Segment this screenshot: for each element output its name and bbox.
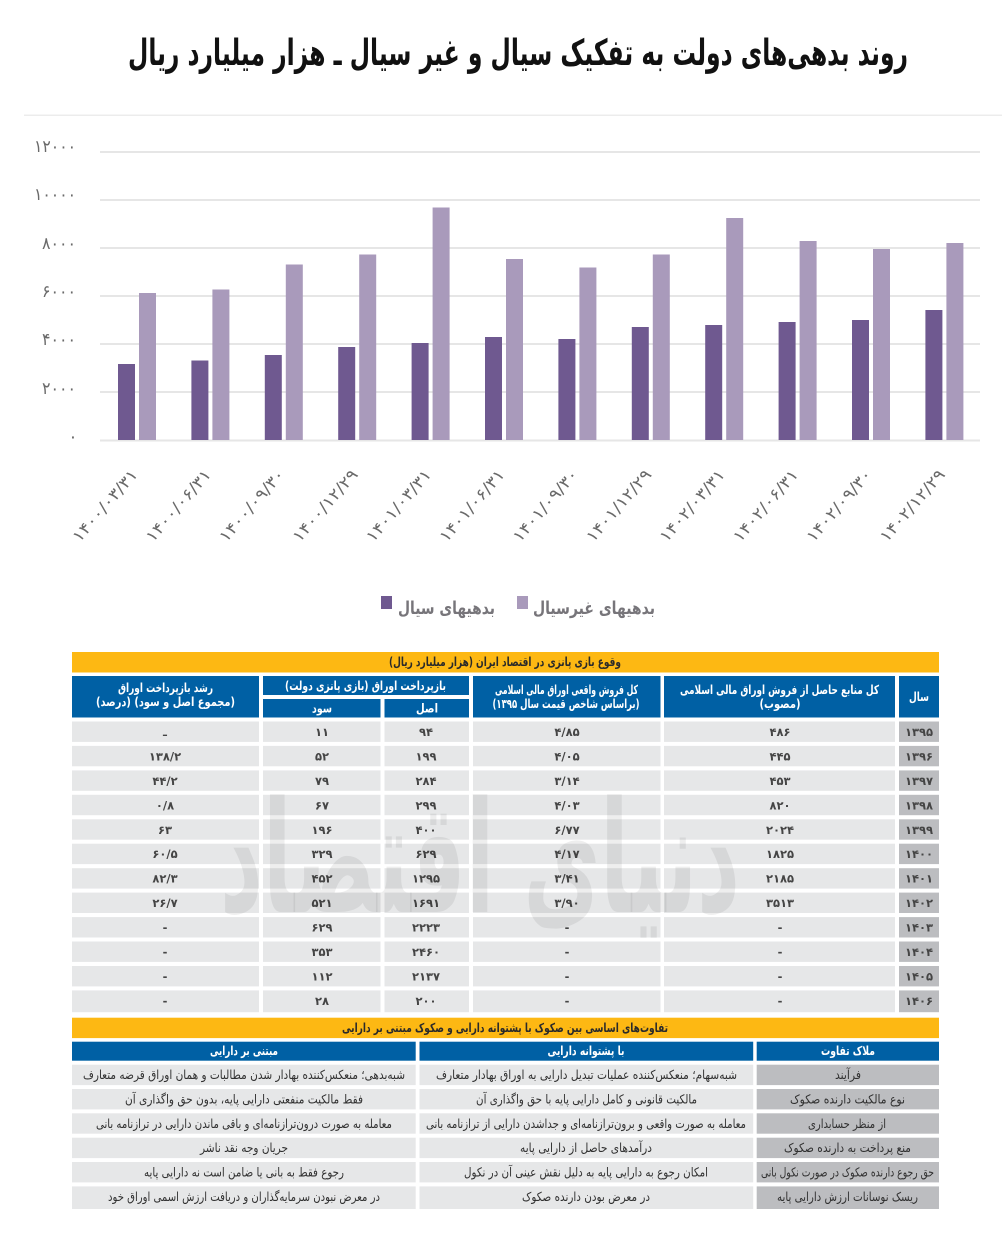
banner: sukuk table title — [72, 1018, 939, 1038]
row 1397: ۴۴/۲ — [152, 774, 178, 788]
row 1405: - — [163, 970, 168, 984]
row 1401: ۳/۴۱ — [554, 872, 580, 886]
row: value risk — [72, 1186, 939, 1209]
row 1396: ۵۲ — [315, 749, 329, 763]
row 1401 — [72, 868, 939, 889]
x axis date labels — [68, 465, 949, 546]
x axis date labels: ۱۴۰۱/۰۹/۳۰ — [509, 465, 582, 546]
y axis labels: ۱۰۰۰۰ — [34, 185, 76, 205]
row 1398: ۰/۸ — [156, 798, 174, 812]
row: process: شبه‌سهام؛ منعکس‌کننده عملیات تبدیل دارایی به اوراق بهادار متعارف — [436, 1067, 737, 1083]
row 1406: ۲۸ — [315, 994, 329, 1008]
row 1395 — [72, 722, 939, 742]
row 1404: ۲۴۶۰ — [412, 945, 440, 959]
x axis date labels: ۱۴۰۰/۰۶/۳۱ — [142, 465, 215, 546]
row 1405: ۲۱۳۷ — [412, 970, 440, 984]
dark bars: liquid debts — [118, 310, 942, 440]
row 1398: ۸۲۰ — [769, 798, 791, 812]
row 1401: ۸۲/۳ — [152, 872, 178, 886]
x axis date labels: ۱۴۰۲/۰۳/۳۱ — [655, 465, 729, 546]
row 1404: - — [163, 945, 168, 959]
row: process — [72, 1065, 939, 1085]
table: sukuk differences — [72, 1018, 939, 1209]
x axis date labels: ۱۴۰۰/۰۳/۳۱ — [68, 465, 142, 546]
row 1403: ۶۲۹ — [311, 921, 333, 935]
row: ownership type — [72, 1089, 939, 1109]
x axis date labels: ۱۴۰۲/۰۹/۳۰ — [802, 465, 876, 546]
bar chart — [34, 137, 980, 546]
row 1395: ـ — [162, 725, 168, 739]
row 1405: - — [778, 970, 783, 984]
row 1398: ۲۹۹ — [415, 798, 437, 812]
light bars: non-liquid debts — [139, 208, 963, 440]
row 1399: ۲۰۲۴ — [766, 823, 794, 837]
row 1402: ۳۵۱۳ — [766, 896, 794, 910]
row: value risk: در معرض بودن دارنده صکوک — [522, 1189, 650, 1205]
row 1402: ۱۶۹۱ — [412, 896, 440, 910]
row 1405: - — [565, 970, 570, 984]
row 1400: ۱۴۰۰ — [905, 847, 933, 861]
row 1406: - — [163, 994, 168, 1008]
row 1403: ۲۲۲۳ — [412, 921, 440, 935]
row 1400: ۶۰/۵ — [152, 847, 178, 861]
row 1396: ۱۳۹۶ — [905, 749, 933, 763]
row 1399: ۶۳ — [158, 823, 172, 837]
row 1398: ۱۳۹۸ — [905, 798, 933, 812]
row 1402: ۵۲۱ — [311, 896, 333, 910]
x axis date labels: ۱۴۰۲/۱۲/۲۹ — [876, 465, 949, 546]
y axis labels: ۰ — [68, 427, 78, 447]
row 1399: ۱۹۶ — [311, 823, 333, 837]
legend: بدهیهای سیال — [398, 599, 495, 619]
row: ownership type: مالکیت قانونی و کامل دارایی پایه با حق واگذاری آن — [476, 1092, 697, 1108]
x axis date labels: ۱۴۰۱/۰۶/۳۱ — [435, 465, 509, 546]
row 1397 — [72, 770, 939, 791]
x axis date labels: ۱۴۰۲/۰۶/۳۱ — [729, 465, 802, 546]
sukuk table header: با پشتوانه دارایی — [548, 1043, 624, 1058]
row 1400: ۳۲۹ — [311, 847, 333, 861]
sukuk table header — [72, 1042, 939, 1061]
legend: بدهیهای غیرسیال — [533, 599, 655, 619]
row 1396: ۱۳۸/۲ — [149, 749, 181, 763]
row 1399: ۶/۷۷ — [554, 823, 580, 837]
row: recourse right: امکان رجوع به دارایی پایه به دلیل نقش عینی آن در نکول — [464, 1164, 708, 1180]
row: process: شبه‌بدهی؛ منعکس‌کننده بهادار شدن مطالبات و همان اوراق قرضه متعارف — [83, 1067, 405, 1083]
row 1395: ۴/۸۵ — [554, 725, 580, 739]
row 1396 — [72, 746, 939, 766]
row 1406: ۱۴۰۶ — [905, 994, 933, 1008]
row: process: فرآیند — [835, 1067, 861, 1083]
table header: (مصوب) — [760, 696, 800, 711]
row 1395: ۴۸۶ — [769, 725, 791, 739]
row: payment source: منع پرداخت به دارنده صکوک — [784, 1140, 911, 1156]
y axis labels — [34, 137, 78, 447]
row 1402 — [72, 893, 939, 913]
row 1405 — [72, 966, 939, 986]
row 1403: - — [778, 921, 783, 935]
table header: کل منابع حاصل از فروش اوراق مالی اسلامی — [680, 682, 880, 697]
row: recourse right: حق رجوع دارنده صکوک در صورت نکول بانی — [761, 1164, 934, 1180]
row: payment source: جریان وجه نقد ناشر — [199, 1140, 288, 1156]
row 1397: ۲۸۴ — [415, 774, 437, 788]
table header: سال — [909, 689, 929, 704]
row 1399: ۴۰۰ — [415, 823, 437, 837]
row: ownership type: فقط مالکیت منفعتی دارایی پایه، بدون حق واگذاری آن — [125, 1092, 363, 1108]
x axis date labels: ۱۴۰۰/۰۹/۳۰ — [215, 465, 288, 546]
sukuk table header: ملاک تفاوت — [821, 1043, 875, 1058]
row 1398: ۶۷ — [315, 798, 329, 812]
row 1406 — [72, 990, 939, 1012]
row 1405: ۱۱۲ — [311, 970, 333, 984]
row: recourse right — [72, 1162, 939, 1182]
row: ownership type: نوع مالکیت دارنده صکوک — [790, 1092, 905, 1108]
y axis labels: ۲۰۰۰ — [42, 379, 76, 399]
row: accounting: معامله به صورت درون‌ترازنامه‌ای و باقی ماندن دارایی در ترازنامه بانی — [96, 1116, 392, 1132]
table header: بازپرداخت اوراق (بازی پانزی دولت) — [285, 678, 446, 693]
row: accounting — [72, 1113, 939, 1134]
row 1402: ۲۶/۷ — [152, 896, 178, 910]
x axis date labels: ۱۴۰۱/۱۲/۲۹ — [582, 465, 655, 546]
row 1403: ۱۴۰۳ — [905, 921, 933, 935]
row 1401: ۴۵۲ — [311, 872, 333, 886]
row 1398 — [72, 795, 939, 815]
table header — [72, 676, 939, 718]
table header: کل فروش واقعی اوراق مالی اسلامی — [495, 682, 638, 697]
banner: ponzi table title: وقوع بازی پانزی در اقتصاد ایران (هزار میلیارد ریال) — [389, 654, 621, 669]
row: value risk: ریسک نوسانات ارزش دارایی پایه — [777, 1189, 918, 1205]
legend — [381, 596, 655, 619]
row 1404: ۱۴۰۴ — [905, 945, 933, 959]
row 1395: ۱۱ — [315, 725, 329, 739]
row 1397: ۱۳۹۷ — [905, 774, 933, 788]
y axis labels: ۱۲۰۰۰ — [34, 137, 76, 157]
row 1404: ۳۵۳ — [311, 945, 333, 959]
x axis date labels: ۱۴۰۱/۰۳/۳۱ — [362, 465, 435, 546]
table header: سود — [312, 700, 332, 716]
x axis date labels: ۱۴۰۰/۱۲/۲۹ — [288, 465, 362, 546]
row 1403: - — [163, 921, 168, 935]
table header: رشد بازپرداخت اوراق — [118, 680, 213, 695]
row 1404: - — [565, 945, 570, 959]
row 1402: ۱۴۰۲ — [905, 896, 933, 910]
y axis labels: ۴۰۰۰ — [42, 330, 76, 350]
row 1402: ۳/۹۰ — [554, 896, 580, 910]
row 1396: ۱۹۹ — [415, 749, 437, 763]
row 1406: ۲۰۰ — [415, 994, 437, 1008]
row 1406: - — [565, 994, 570, 1008]
banner: ponzi table title — [72, 652, 939, 672]
row: payment source — [72, 1138, 939, 1158]
row 1399: ۱۳۹۹ — [905, 823, 933, 837]
table header: (براساس شاخص قیمت سال ۱۳۹۵) — [492, 696, 640, 711]
table header: اصل — [416, 700, 438, 716]
row 1401: ۱۲۹۵ — [412, 872, 440, 886]
row 1404 — [72, 942, 939, 962]
row: accounting: معامله به صورت واقعی و برون‌ترازنامه‌ای و جداشدن دارایی از ترازنامه بانی — [426, 1116, 746, 1132]
row 1400: ۶۲۹ — [415, 847, 437, 861]
row 1400: ۴/۱۷ — [554, 847, 580, 861]
row 1397: ۳/۱۴ — [554, 774, 580, 788]
table: ponzi game — [72, 652, 939, 1012]
banner: sukuk table title: تفاوت‌های اساسی بین صکوک با پشتوانه دارایی و صکوک مبتنی بر دارایی — [342, 1020, 668, 1035]
table header: (مجموع اصل و سود) (درصد) — [96, 694, 235, 709]
row 1403 — [72, 917, 939, 938]
sukuk table header: مبتنی بر دارایی — [210, 1043, 278, 1058]
row 1400 — [72, 844, 939, 864]
row 1403: - — [565, 921, 570, 935]
row 1396: ۴۴۵ — [769, 749, 791, 763]
row 1404: - — [778, 945, 783, 959]
row 1401: ۲۱۸۵ — [766, 872, 794, 886]
row: recourse right: رجوع فقط به بانی یا ضامن است نه دارایی پایه — [144, 1164, 344, 1180]
row 1395: ۹۴ — [419, 725, 433, 739]
row 1397: ۷۹ — [315, 774, 329, 788]
row 1398: ۴/۰۳ — [554, 798, 580, 812]
row 1397: ۴۵۳ — [769, 774, 791, 788]
y axis labels: ۶۰۰۰ — [42, 282, 76, 302]
row 1406: - — [778, 994, 783, 1008]
row: accounting: از منظر حسابداری — [808, 1116, 886, 1132]
y axis labels: ۸۰۰۰ — [42, 234, 76, 254]
row 1399 — [72, 819, 939, 840]
row 1396: ۴/۰۵ — [554, 749, 580, 763]
row: payment source: درآمدهای حاصل از دارایی پایه — [520, 1140, 652, 1156]
row: value risk: در معرض نبودن سرمایه‌گذاران و دریافت ارزش اسمی اوراق خود — [108, 1189, 380, 1205]
row 1405: ۱۴۰۵ — [905, 970, 933, 984]
row 1395: ۱۳۹۵ — [905, 725, 933, 739]
row 1400: ۱۸۲۵ — [766, 847, 794, 861]
row 1401: ۱۴۰۱ — [905, 872, 933, 886]
